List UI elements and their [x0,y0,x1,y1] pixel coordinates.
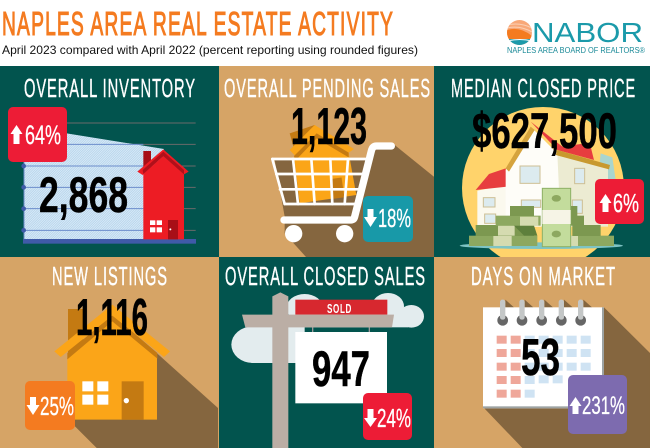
heading: OVERALL INVENTORY [24,73,196,103]
panel: overall inventory [0,66,219,257]
badge: up 231% [568,375,627,434]
badge: down 24%: 24% [377,403,411,433]
badge: up 6%: 6% [613,188,639,218]
badge: down 24% [363,393,412,440]
badge: down 18%: 18% [378,203,411,233]
number: 2,868 [39,167,128,223]
badge: up 6% [595,179,644,224]
badge: up 64%: 64% [25,120,61,150]
icon: house with cash [460,107,624,269]
number: 947 [312,341,370,397]
icon: shell [507,20,532,45]
icon: shopping cart with house [272,125,436,257]
badge: down 18% [363,196,413,242]
panel: overall closed sales [219,257,434,448]
badge: down 25%: 25% [40,391,74,421]
panel: days on market [434,257,650,448]
badge: up 64% [8,107,67,162]
panel: new listings [0,257,219,448]
panel: overall pending sales [219,66,436,257]
badge: down 25% [25,381,75,430]
badge: up 231%: 231% [582,392,625,420]
number: 1,123 [291,98,367,156]
number: 53 [521,329,560,387]
logo: NABOR [507,20,645,53]
subtitle: April 2023 compared with April 2022 (percent reporting using rounded figures) [2,43,418,57]
icon: calendar [483,300,650,448]
number: 1,116 [76,289,148,347]
panel: median closed price [434,66,650,269]
heading: OVERALL PENDING SALES [224,73,431,103]
area chart with house [21,123,196,244]
icon: sold sign [231,292,424,448]
heading: NEW LISTINGS [52,261,168,291]
clouds [231,293,424,363]
icon: orange house [54,305,218,448]
sold label: SOLD [327,301,352,316]
heading: OVERALL CLOSED SALES [225,261,426,291]
logo wordmark: NABOR [532,17,643,48]
